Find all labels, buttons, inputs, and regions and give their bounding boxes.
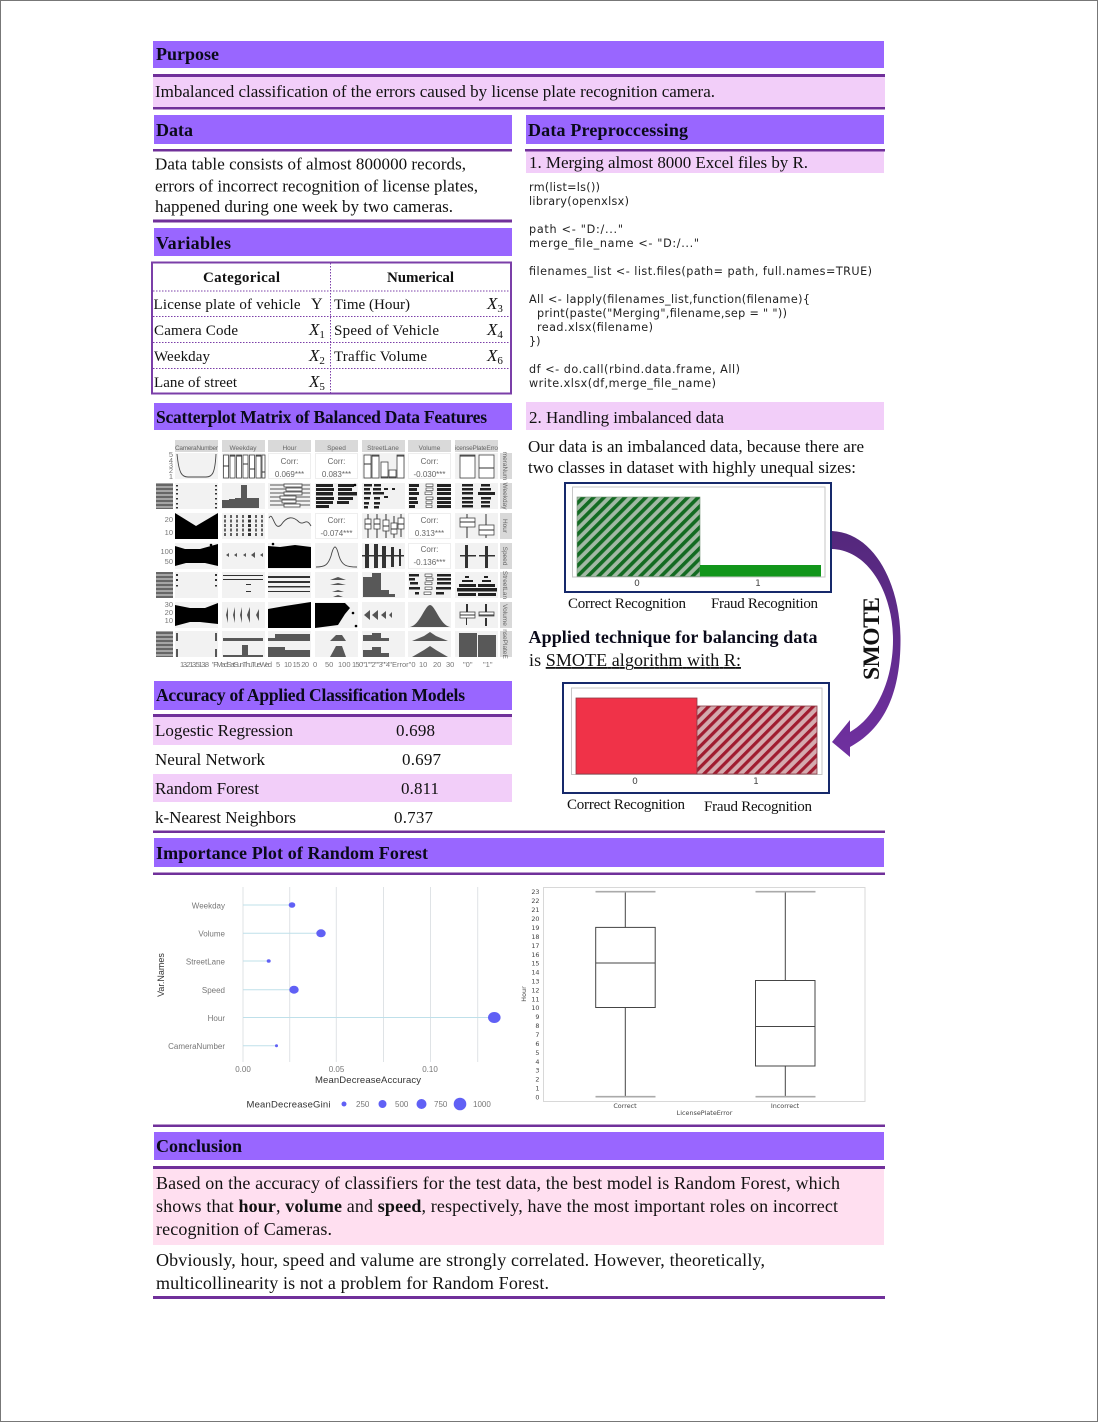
R code block: filenames_list <- list.files(path= path, full.names=TRUE) bbox=[529, 265, 872, 278]
variables table: Time (Hour) bbox=[334, 297, 410, 313]
matrix axis labels: 50 bbox=[165, 557, 173, 566]
dots and lines, rows 2 and 5 bbox=[176, 485, 310, 592]
heading: Purpose bbox=[153, 41, 884, 68]
R code block: rm(list=ls()) bbox=[529, 181, 600, 194]
chart: scatterplot matrix: CameraNumber bbox=[175, 445, 219, 452]
variables table: Camera Code bbox=[154, 323, 238, 339]
step 1 heading bbox=[525, 149, 885, 173]
correlation cells: 0.083*** bbox=[322, 470, 351, 479]
accuracy table: k-Nearest Neighbors bbox=[155, 808, 296, 827]
variables table: Numerical bbox=[387, 270, 454, 286]
legend: MeanDecreaseGini: 250 bbox=[356, 1100, 370, 1109]
variables table: 3 bbox=[497, 303, 503, 315]
heading: Data Preproccessing bbox=[526, 115, 884, 144]
boxplot y axis: 14 bbox=[531, 968, 540, 976]
chart: imbalanced classes: 1 bbox=[755, 579, 761, 589]
panel: accuracy of classification models bbox=[153, 681, 512, 827]
chart: hour boxplot: Incorrect bbox=[771, 1102, 800, 1110]
chart: variable importance lollipop: Speed bbox=[202, 986, 225, 995]
variables table: 1 bbox=[319, 329, 325, 341]
variables table: 2 bbox=[319, 355, 325, 367]
captions: imbalanced chart bbox=[568, 596, 818, 612]
scatter: black fills bbox=[175, 484, 357, 628]
panel: data preprocessing bbox=[525, 115, 900, 815]
legend: MeanDecreaseGini bbox=[246, 1098, 491, 1110]
conclusion highlighted text bbox=[153, 1166, 885, 1245]
imbalance description bbox=[528, 437, 864, 477]
captions: balanced chart: Correct Recognition bbox=[567, 797, 686, 813]
panel: variables bbox=[152, 228, 512, 394]
boxes for speed column bbox=[362, 544, 495, 626]
boxplot y axis: 22 bbox=[531, 897, 540, 905]
chart: variable importance lollipop: Hour bbox=[208, 1014, 225, 1023]
boxplot y axis: 3 bbox=[535, 1066, 540, 1074]
chart: scatterplot matrix: StreetLane bbox=[367, 445, 399, 452]
matrix axis labels: 30 bbox=[165, 600, 173, 609]
accuracy table: Random Forest bbox=[155, 779, 259, 798]
boxplot y axis: 17 bbox=[531, 942, 540, 950]
applied technique text bbox=[528, 627, 818, 670]
chart: variable importance lollipop: 0.10 bbox=[422, 1065, 438, 1074]
chart: variable importance lollipop bbox=[156, 887, 501, 1110]
violin strips, row 6 bbox=[424, 484, 433, 594]
boxplot y axis: 9 bbox=[535, 1013, 540, 1021]
data description: Data table consists of almost 800000 records, bbox=[155, 154, 466, 174]
heading: Accuracy: Accuracy of Applied Classification Models bbox=[156, 685, 465, 705]
applied technique text: Applied technique for balancing data bbox=[528, 627, 818, 647]
boxplot y axis: 1 bbox=[535, 1084, 540, 1092]
matrix axis labels: 0 bbox=[313, 660, 317, 669]
chart: variable importance lollipop: 0.05 bbox=[329, 1065, 345, 1074]
variables table: 6 bbox=[497, 355, 503, 367]
chart: scatterplot matrix: Hour bbox=[282, 445, 297, 452]
boxplot y axis: 21 bbox=[531, 906, 540, 914]
chart: imbalanced classes bbox=[565, 483, 831, 592]
correlation cells: 0.069*** bbox=[275, 470, 304, 479]
applied technique text: is SMOTE algorithm with R: bbox=[529, 650, 741, 670]
heading: Importance Plot of Random Forest bbox=[153, 830, 885, 875]
heading: Purpose: Purpose bbox=[156, 44, 219, 64]
chart: hour boxplot: Correct bbox=[613, 1102, 637, 1110]
heading: Variables bbox=[154, 228, 512, 256]
chart: variable importance lollipop: Volume bbox=[198, 930, 226, 938]
strip violins bbox=[226, 552, 450, 627]
data description bbox=[153, 149, 512, 222]
chart: scatterplot matrix: meraNum bbox=[501, 452, 508, 480]
chart: scatterplot matrix: Hour bbox=[501, 519, 508, 534]
boxplot y axis: 4 bbox=[535, 1058, 540, 1066]
correlation cells: Corr: bbox=[328, 516, 345, 525]
chart: scatterplot matrix: Volume bbox=[419, 445, 441, 452]
matrix axis labels: 5 bbox=[276, 660, 280, 669]
correlation cells: Corr: bbox=[281, 457, 298, 466]
panel: scatterplot matrix bbox=[154, 403, 512, 669]
R code block: df <- do.call(rbind.data.frame, All) bbox=[529, 363, 740, 376]
variables table: Traffic Volume bbox=[334, 349, 427, 365]
R code block: merge_file_name <- "D:/..." bbox=[529, 237, 699, 250]
plot panel backgrounds bbox=[175, 453, 498, 657]
matrix axis labels: 100 bbox=[338, 660, 351, 669]
matrix axis labels: 10 bbox=[165, 528, 173, 537]
correlation cells: Corr: bbox=[421, 516, 438, 525]
matrix axis labels bbox=[160, 450, 493, 669]
matrix axis labels: 10 bbox=[419, 660, 427, 669]
heading: Conclusion bbox=[153, 1124, 885, 1160]
panel: data bbox=[153, 115, 512, 222]
accuracy table: 0.698 bbox=[396, 721, 435, 740]
matrix axis labels: Error"0 bbox=[392, 660, 416, 669]
captions: imbalanced chart: Correct Recognition bbox=[568, 596, 686, 612]
chart: scatterplot matrix: Speed bbox=[327, 445, 346, 452]
matrix axis labels: 20 bbox=[165, 515, 173, 524]
panel: importance plot bbox=[153, 830, 885, 1117]
box glyphs bbox=[224, 455, 494, 618]
variables table: X bbox=[309, 346, 319, 365]
black blob strips bbox=[316, 484, 497, 596]
legend: MeanDecreaseGini: 500 bbox=[395, 1100, 409, 1109]
accuracy table: Logestic Regression bbox=[155, 721, 294, 740]
legend: MeanDecreaseGini: MeanDecreaseGini bbox=[246, 1100, 330, 1110]
arrow: SMOTE bbox=[832, 531, 900, 757]
boxplot y axis: 2 bbox=[535, 1076, 540, 1084]
variables table: License plate of vehicle bbox=[154, 297, 301, 313]
matrix axis labels: 13.213.513.8 bbox=[180, 660, 209, 669]
matrix axis labels: 10 15 20 bbox=[284, 660, 309, 669]
captions: balanced chart: Fraud Recognition bbox=[704, 799, 812, 815]
accuracy table bbox=[153, 714, 512, 827]
chart: hour boxplot: LicensePlateError bbox=[677, 1109, 733, 1117]
accuracy table: 0.697 bbox=[402, 750, 442, 769]
imbalance description: Our data is an imbalanced data, because there are bbox=[528, 437, 864, 456]
chart: variable importance lollipop: MeanDecreaseAccuracy bbox=[315, 1075, 421, 1086]
variables table: 4 bbox=[497, 329, 503, 341]
boxplot y axis: 15 bbox=[531, 960, 540, 968]
conclusion highlighted text: shows that hour, volume and speed, respectively, have the most important roles on incorrect bbox=[156, 1196, 838, 1216]
chart: variable importance lollipop: 0.00 bbox=[235, 1065, 251, 1074]
boxplot y axis: 7 bbox=[535, 1031, 540, 1039]
matrix axis labels: 2 bbox=[169, 466, 173, 475]
chart: scatterplot matrix: Weekday bbox=[230, 445, 257, 452]
boxplot y axis: 23 bbox=[531, 888, 540, 896]
conclusion closing text bbox=[153, 1250, 885, 1299]
heading: Conclusion: Conclusion bbox=[156, 1136, 242, 1156]
heading: Data: Data bbox=[156, 120, 193, 140]
R code block: All <- lapply(filenames_list,function(filename){ bbox=[529, 293, 810, 306]
chart: variable importance lollipop: CameraNumber bbox=[168, 1042, 225, 1051]
variables table: X bbox=[487, 320, 497, 339]
accuracy table: 0.811 bbox=[401, 779, 439, 798]
correlation cells: -0.030*** bbox=[413, 470, 446, 479]
boxplot y axis: 18 bbox=[531, 933, 540, 941]
captions: balanced chart bbox=[567, 797, 812, 815]
chart: hour boxplot bbox=[520, 888, 865, 1117]
R code block: read.xlsx(filename) bbox=[537, 321, 653, 334]
captions: imbalanced chart: Fraud Recognition bbox=[711, 596, 818, 612]
matrix axis labels: 1 bbox=[169, 472, 173, 481]
chart: variable importance lollipop: Weekday bbox=[192, 902, 225, 910]
data description: happened during one week by two cameras. bbox=[155, 197, 453, 216]
chart: scatterplot matrix: StreetLan bbox=[501, 571, 508, 599]
variables table: 5 bbox=[319, 381, 325, 393]
heading: Importance Plot of Random Forest: Importance Plot of Random Forest bbox=[156, 843, 428, 863]
matrix axis labels: 20 bbox=[165, 608, 173, 617]
variables table: Speed of Vehicle bbox=[334, 323, 439, 339]
correlation cells: Corr: bbox=[421, 545, 438, 554]
variables table: Weekday bbox=[154, 349, 210, 365]
matrix axis labels: 100 bbox=[160, 547, 173, 556]
step 2 heading bbox=[526, 402, 884, 430]
chart: scatterplot matrix: Weekday bbox=[501, 483, 508, 510]
data description: errors of incorrect recognition of license plates, bbox=[155, 176, 478, 196]
chart: imbalanced classes: 0 bbox=[634, 579, 640, 589]
chart: balanced classes bbox=[563, 683, 829, 793]
imbalance description: two classes in dataset with highly unequal sizes: bbox=[528, 458, 856, 477]
variables table: Y bbox=[311, 296, 323, 313]
legend: MeanDecreaseGini: 750 bbox=[434, 1100, 448, 1109]
conclusion closing text: multicollinearity is not a problem for Random Forest. bbox=[156, 1273, 549, 1293]
chart: variable importance lollipop: StreetLane bbox=[186, 958, 226, 966]
variables table: X bbox=[309, 320, 319, 339]
R code block: write.xlsx(df,merge_file_name) bbox=[529, 377, 716, 390]
matrix axis labels: 20 bbox=[433, 660, 441, 669]
heading: Data bbox=[154, 115, 512, 144]
heading: Scatterplot Matrix bbox=[154, 403, 512, 430]
boxplot y axis: 0 bbox=[535, 1094, 540, 1102]
heading: Data Preproccessing: Data Preproccessing bbox=[528, 120, 688, 140]
chart: balanced classes: 0 bbox=[632, 777, 638, 787]
matrix axis labels: "1" bbox=[483, 660, 493, 669]
boxplot y axis: 19 bbox=[531, 924, 540, 932]
conclusion highlighted text: recognition of Cameras. bbox=[156, 1219, 332, 1239]
accuracy table: 0.737 bbox=[394, 808, 434, 827]
matrix axis labels: "0" bbox=[463, 660, 473, 669]
density lines bbox=[177, 454, 357, 567]
panel: purpose bbox=[153, 41, 885, 110]
conclusion highlighted text: Based on the accuracy of classifiers for the test data, the best model is Random Forest, which bbox=[156, 1173, 840, 1193]
conclusion closing text: Obviously, hour, speed and valume are strongly correlated. However, theoretically, bbox=[156, 1250, 765, 1270]
matrix axis labels: 3 bbox=[169, 461, 173, 470]
variables table: X bbox=[309, 372, 319, 391]
chart: scatterplot matrix bbox=[156, 440, 512, 669]
variables table bbox=[152, 262, 511, 394]
boxplot y axis: 11 bbox=[531, 996, 540, 1004]
accuracy table: Neural Network bbox=[155, 750, 266, 769]
heading: Variables: Variables bbox=[156, 233, 231, 253]
arrow: SMOTE: SMOTE bbox=[859, 597, 885, 680]
boxplot y axis: 10 bbox=[531, 1004, 540, 1012]
correlation cells: -0.136*** bbox=[413, 558, 446, 567]
R code block: }) bbox=[529, 335, 540, 348]
heading: Scatterplot Matrix: Scatterplot Matrix of Balanced Data Features bbox=[156, 407, 487, 427]
matrix axis labels: 5 bbox=[169, 450, 173, 459]
matrix axis labels: 10 bbox=[165, 616, 173, 625]
chart: hour boxplot: Hour bbox=[520, 986, 528, 1002]
matrix axis labels: 50 bbox=[325, 660, 333, 669]
R code block: library(openxlsx) bbox=[529, 195, 629, 208]
R code block: print(paste("Merging",filename,sep = " ")) bbox=[537, 307, 787, 320]
legend: MeanDecreaseGini: 1000 bbox=[473, 1100, 491, 1109]
bar histograms bbox=[176, 485, 496, 657]
matrix axis labels: 4 bbox=[169, 456, 173, 465]
chart: scatterplot matrix: icensePlateErro bbox=[455, 445, 498, 452]
boxplot y axis: 12 bbox=[531, 986, 540, 994]
boxplot y axis: 16 bbox=[531, 951, 540, 959]
matrix axis labels: 30 bbox=[446, 660, 454, 669]
R code block bbox=[529, 181, 872, 390]
R code block: path <- "D:/..." bbox=[529, 223, 623, 236]
correlation cells bbox=[268, 454, 450, 568]
boxplot y axis: 20 bbox=[531, 915, 540, 923]
panel: conclusion bbox=[153, 1124, 885, 1299]
step 1 heading: 1. Merging almost 8000 Excel files by R. bbox=[529, 153, 808, 172]
chart: scatterplot matrix: Volume bbox=[501, 604, 508, 626]
correlation cells: -0.074*** bbox=[320, 529, 353, 538]
correlation cells: 0.313*** bbox=[415, 529, 444, 538]
correlation cells: Corr: bbox=[421, 457, 438, 466]
purpose text bbox=[153, 74, 885, 110]
matrix axis labels: "FMadSatSunThuTueWed bbox=[212, 660, 272, 669]
heading: Accuracy bbox=[154, 681, 512, 710]
step 2 heading: 2. Handling imbalanced data bbox=[529, 408, 724, 427]
variables table: Lane of street bbox=[154, 375, 238, 391]
variables table: X bbox=[487, 346, 497, 365]
horizontal box strips, row 2 bbox=[270, 484, 310, 507]
boxplot y axis: 13 bbox=[531, 978, 540, 986]
boxplot y axis: 6 bbox=[535, 1040, 540, 1048]
chart: scatterplot matrix: nsePlateE bbox=[501, 629, 508, 659]
purpose text: Imbalanced classification of the errors caused by license plate recognition camera. bbox=[155, 82, 715, 101]
weekday-hour dotted columns bbox=[225, 515, 262, 537]
chart: scatterplot matrix: Speed bbox=[501, 547, 508, 566]
boxplot y axis bbox=[531, 888, 540, 1102]
boxplot y axis: 8 bbox=[535, 1022, 540, 1030]
variables table: X bbox=[487, 294, 497, 313]
boxplot y axis: 5 bbox=[535, 1049, 540, 1057]
matrix axis labels: 150"1""2""3""4" bbox=[352, 660, 392, 669]
variables table: Categorical bbox=[203, 270, 280, 286]
chart: variable importance lollipop: Var.Names bbox=[156, 953, 166, 997]
correlation cells: Corr: bbox=[328, 457, 345, 466]
chart: balanced classes: 1 bbox=[753, 777, 759, 787]
